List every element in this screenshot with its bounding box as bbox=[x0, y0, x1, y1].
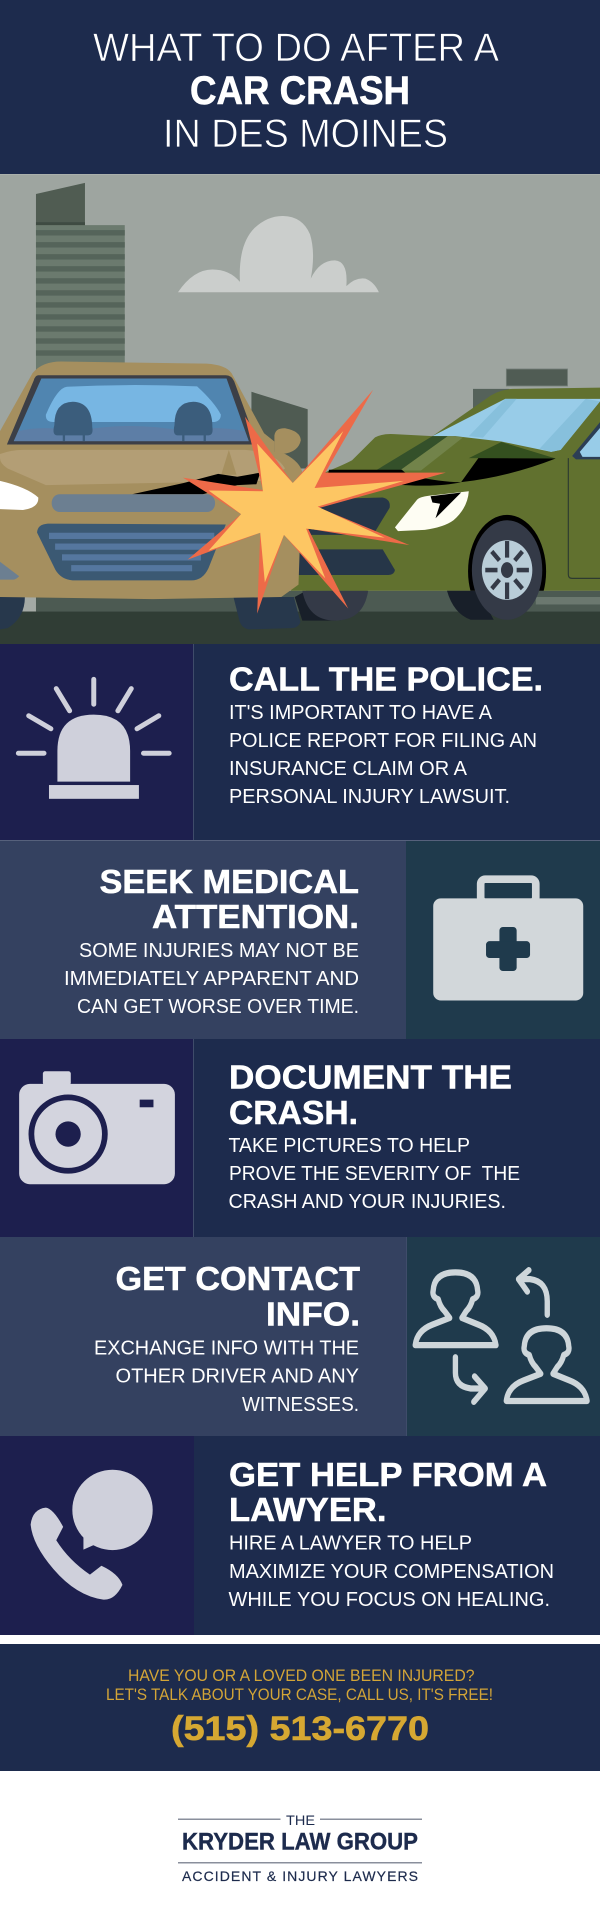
text: call the police bbox=[229, 702, 537, 808]
text: call to action: HAVE YOU OR A LOVED ONE BEEN INJURED? bbox=[128, 1666, 474, 1685]
header: title: IN DES MOINES bbox=[163, 112, 448, 156]
step 3: document the crash bbox=[0, 1039, 600, 1237]
road bbox=[0, 591, 600, 645]
text: get contact info: WITNESSES. bbox=[242, 1394, 359, 1416]
text: document the crash: TAKE PICTURES TO HELP bbox=[228, 1135, 470, 1157]
text: call to action bbox=[106, 1666, 493, 1704]
grille: tan car bbox=[37, 524, 226, 580]
icon: police siren bbox=[18, 679, 169, 799]
text: get help from a lawyer: MAXIMIZE YOUR COMPENSATION bbox=[229, 1561, 554, 1583]
heading: get contact info: INFO. bbox=[266, 1296, 360, 1332]
logo: the kryder law group: KRYDER LAW GROUP bbox=[182, 1829, 418, 1856]
heading: get help from a lawyer: GET HELP FROM A bbox=[229, 1456, 547, 1493]
heading: seek medical attention: ATTENTION. bbox=[152, 898, 359, 935]
heading: get help from a lawyer bbox=[229, 1456, 547, 1528]
text: call to action: LET'S TALK ABOUT YOUR CASE, CALL US, IT'S FREE! bbox=[106, 1685, 493, 1704]
logo: the kryder law group: THE bbox=[286, 1812, 315, 1828]
text: get contact info bbox=[94, 1338, 359, 1416]
icon: camera bbox=[19, 1071, 175, 1184]
headlight: tan car bbox=[0, 481, 38, 510]
building: left tower bbox=[36, 183, 125, 391]
text: seek medical attention bbox=[64, 940, 359, 1018]
header: title: WHAT TO DO AFTER A bbox=[93, 26, 499, 70]
headlight: green car bbox=[395, 491, 469, 531]
heading: seek medical attention bbox=[100, 863, 359, 935]
header: title: CAR CRASH bbox=[190, 69, 410, 113]
header: title bbox=[0, 0, 600, 174]
step 5: get help from a lawyer bbox=[0, 1436, 600, 1635]
windshield: tan car bbox=[7, 375, 257, 444]
heading: get contact info bbox=[116, 1260, 360, 1332]
logo: the kryder law group: ACCIDENT & INJURY LAWYERS bbox=[182, 1868, 418, 1884]
text: seek medical attention: IMMEDIATELY APPARENT AND bbox=[64, 968, 359, 990]
text: call the police: POLICE REPORT FOR FILING AN bbox=[229, 730, 537, 752]
text: seek medical attention: CAN GET WORSE OVER TIME. bbox=[77, 996, 359, 1018]
buildings: background right bbox=[251, 369, 568, 468]
text: document the crash bbox=[228, 1135, 520, 1213]
text: document the crash: CRASH AND YOUR INJURIES. bbox=[228, 1191, 506, 1213]
text: seek medical attention: SOME INJURIES MAY NOT BE bbox=[79, 940, 359, 962]
heading: get help from a lawyer: LAWYER. bbox=[229, 1491, 386, 1528]
step 2: seek medical attention bbox=[0, 841, 600, 1039]
step 1: call the police bbox=[0, 644, 600, 841]
heading: get contact info: GET CONTACT bbox=[116, 1260, 360, 1297]
text: get contact info: EXCHANGE INFO WITH THE bbox=[94, 1338, 359, 1360]
green car bbox=[285, 388, 600, 628]
logo: the kryder law group bbox=[178, 1812, 422, 1884]
impact star bbox=[183, 390, 446, 614]
call to action banner bbox=[0, 1644, 600, 1771]
heading: document the crash bbox=[229, 1058, 512, 1131]
step 4: get contact info bbox=[0, 1237, 600, 1436]
cloud bbox=[178, 216, 379, 292]
text: document the crash: PROVE THE SEVERITY OF THE bbox=[229, 1163, 520, 1185]
text: call the police: IT'S IMPORTANT TO HAVE A bbox=[229, 702, 493, 724]
wheel: green car bbox=[447, 515, 546, 628]
text: get help from a lawyer: HIRE A LAWYER TO HELP bbox=[229, 1533, 472, 1555]
icon: phone with speech bubble bbox=[31, 1470, 153, 1600]
heading: document the crash: CRASH. bbox=[229, 1094, 358, 1131]
text: call the police: INSURANCE CLAIM OR A bbox=[229, 758, 468, 780]
heading: seek medical attention: SEEK MEDICAL bbox=[100, 863, 359, 900]
text: get help from a lawyer: WHILE YOU FOCUS ON HEALING. bbox=[228, 1589, 550, 1611]
icon: medical kit bbox=[433, 879, 583, 1001]
illustration: car crash scene bbox=[0, 174, 600, 645]
heading: document the crash: DOCUMENT THE bbox=[229, 1058, 512, 1096]
tan car bbox=[0, 362, 302, 629]
phone number: (515) 513-6770 bbox=[171, 1710, 429, 1748]
text: get contact info: OTHER DRIVER AND ANY bbox=[116, 1366, 359, 1388]
text: call the police: PERSONAL INJURY LAWSUIT. bbox=[229, 786, 510, 808]
heading: call the police: CALL THE POLICE. bbox=[229, 660, 543, 698]
icon: people exchanging info bbox=[415, 1270, 587, 1402]
text: get help from a lawyer bbox=[228, 1533, 554, 1611]
